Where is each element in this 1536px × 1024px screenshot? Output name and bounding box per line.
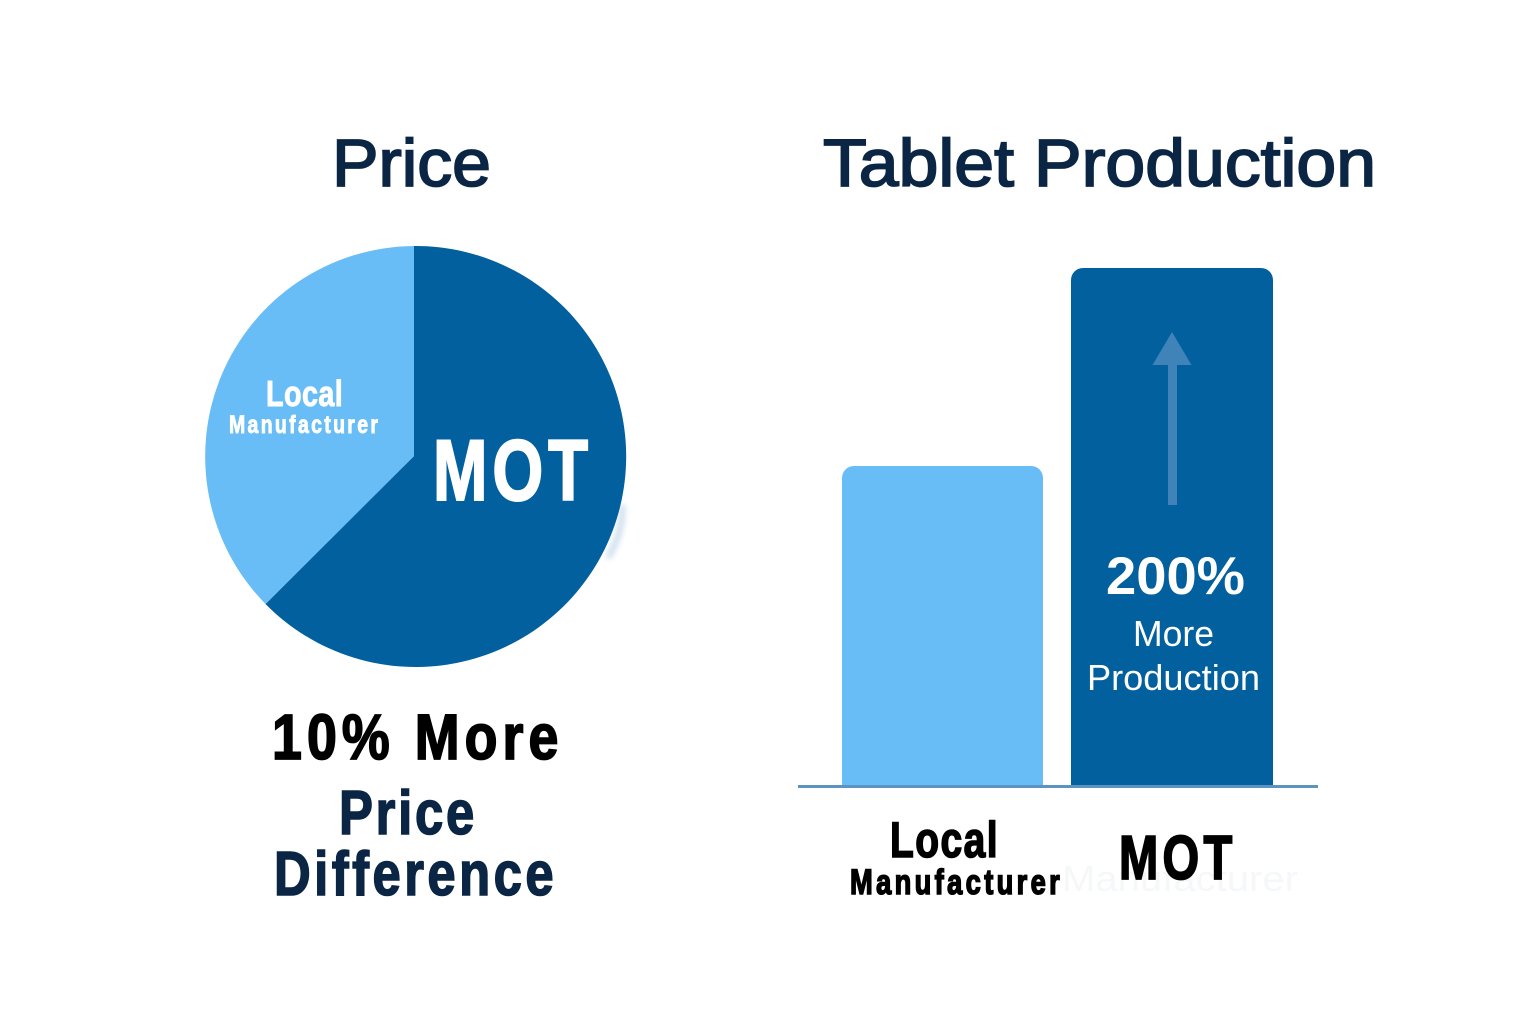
pie edge smudge	[608, 505, 622, 558]
callout: 10% More Price Difference: Difference	[274, 840, 554, 909]
pie label: Local Manufacturer: Local	[266, 373, 343, 414]
callout: 10% More Price Difference	[272, 701, 558, 909]
pie slice: Local Manufacturer	[205, 246, 414, 604]
axis label: Local Manufacturer	[850, 811, 1060, 902]
axis label: MOT: MOT	[1119, 823, 1233, 893]
bar: MOT	[1071, 268, 1273, 785]
heading: Price: Price	[332, 126, 491, 201]
pie slice: MOT	[266, 246, 626, 667]
bar value: 200% More Production: Production	[1087, 657, 1260, 698]
bar chart: tablet production	[798, 268, 1318, 902]
axis label: Local Manufacturer: Local	[890, 811, 998, 868]
pie label: MOT: MOT	[433, 423, 588, 519]
callout: 10% More Price Difference: 10% More	[272, 701, 558, 773]
callout: 10% More Price Difference: Price	[339, 779, 474, 848]
bar: Local Manufacturer	[842, 466, 1043, 785]
ghost text: faded Manufacturer: Manufacturer	[1062, 858, 1298, 899]
heading: Tablet Production: Tablet Production	[823, 126, 1376, 201]
bar value: 200% More Production: 200%	[1106, 547, 1245, 606]
bar value: 200% More Production: More	[1133, 613, 1214, 654]
axis line	[798, 785, 1318, 788]
pie chart: price share	[205, 246, 626, 667]
axis label: Local Manufacturer: Manufacturer	[850, 863, 1060, 902]
pie label: Local Manufacturer	[229, 373, 378, 439]
icon: up arrow	[1152, 332, 1192, 505]
pie label: Local Manufacturer: Manufacturer	[229, 411, 378, 439]
bar value: 200% More Production	[1087, 547, 1260, 698]
